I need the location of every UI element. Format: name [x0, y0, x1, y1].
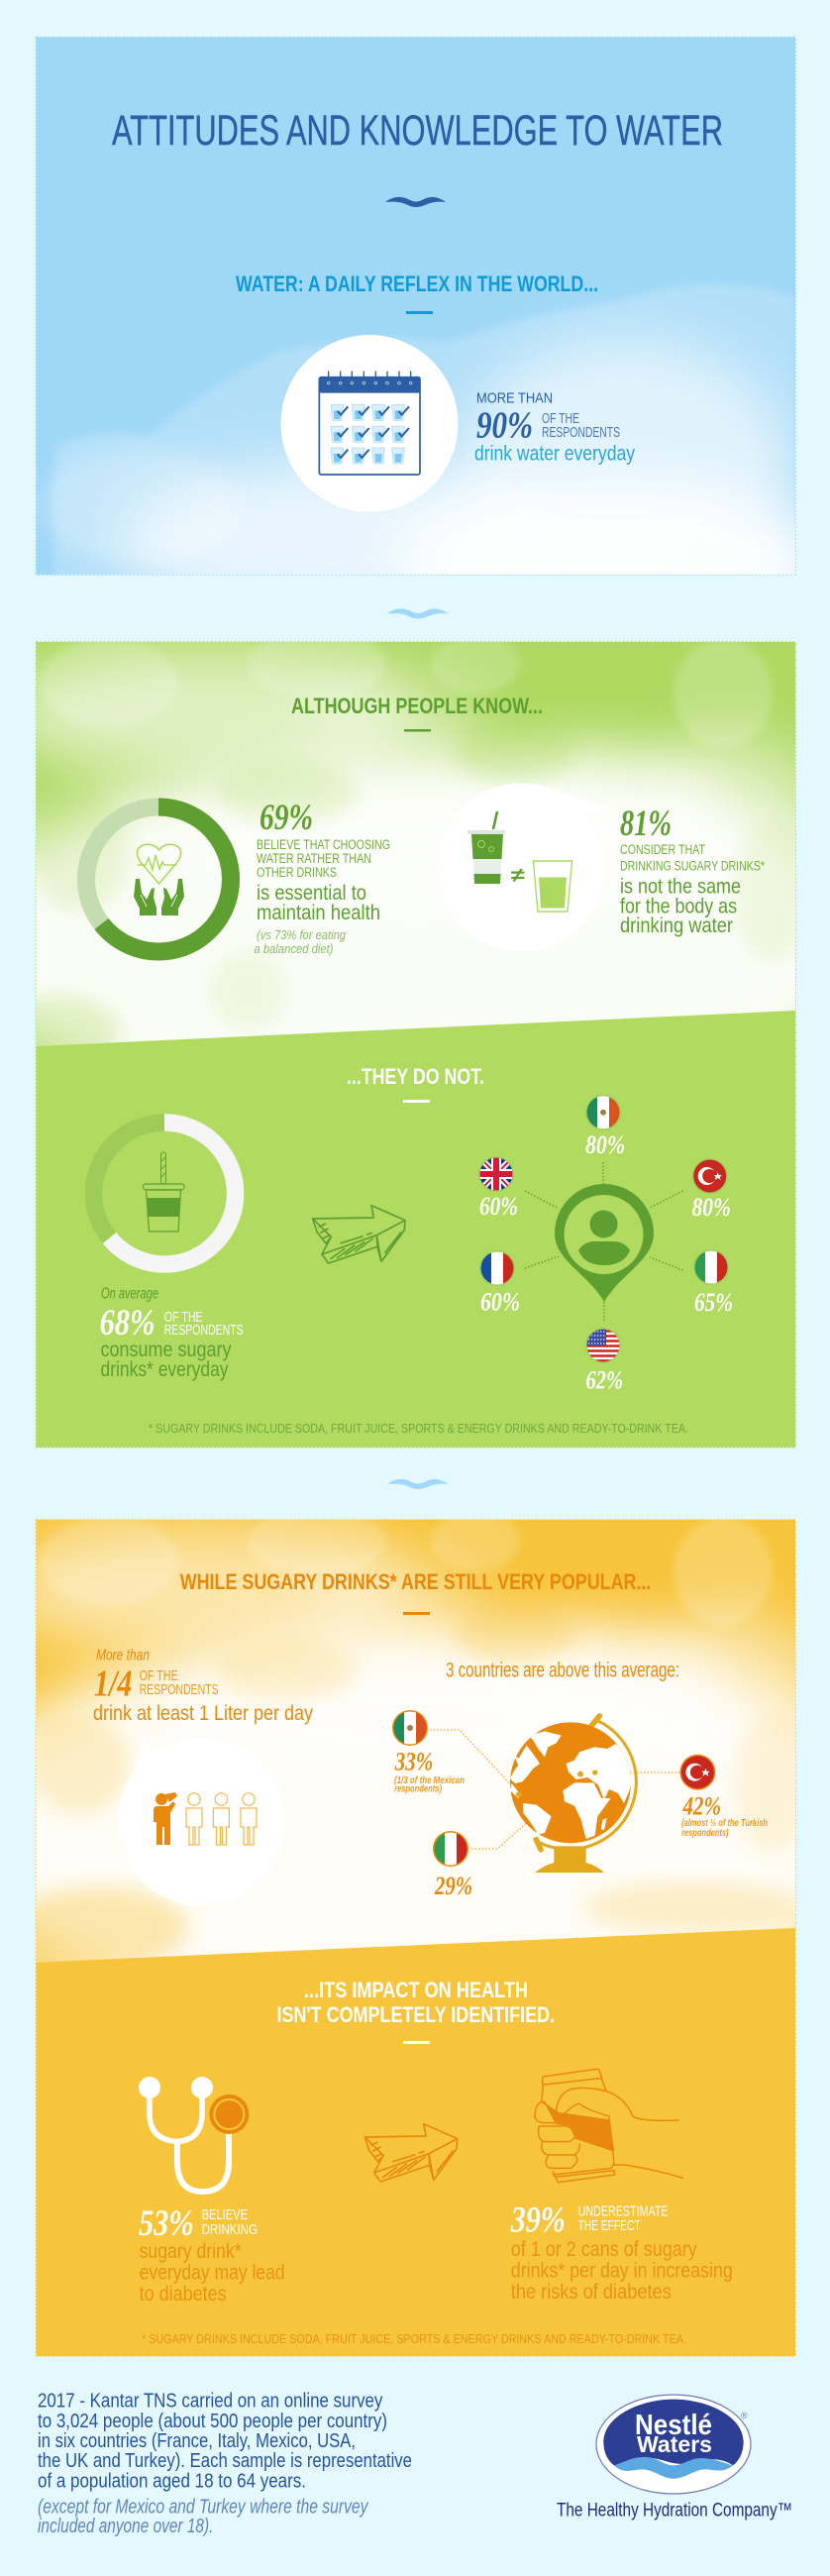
- stat: one quarter: drink at least 1 Liter per day: [93, 1702, 313, 1725]
- flag: Mexico 33 percent: (1/3 of the Mexican: [394, 1775, 465, 1786]
- flag: UK 60 percent: [478, 1156, 517, 1215]
- heading: water a daily reflex: WATER: A DAILY REFLEX IN THE WORLD...: [236, 271, 598, 296]
- flag: Turkey 42 percent: respondents): [681, 1828, 729, 1839]
- flag: Turkey 80 percent: [691, 1158, 730, 1217]
- heading: its impact on health: [277, 1978, 555, 2027]
- stat: 81 percent: for the body as: [620, 896, 737, 917]
- arrow: [313, 1206, 405, 1263]
- heading underline: [403, 1100, 430, 1103]
- heading: its impact on health: ...ITS IMPACT ON HEALTH: [304, 1978, 528, 2002]
- stat: 39 percent: 39%: [510, 2200, 566, 2241]
- footnote: sugary drinks definition: * SUGARY DRINKS INCLUDE SODA, FRUIT JUICE, SPORTS & ENERGY DRINKS AND READY-TO-DRINK TEA.: [149, 1421, 688, 1436]
- cloud texture: [36, 1520, 795, 1963]
- stat: 53 percent: everyday may lead: [140, 2261, 285, 2285]
- flag: Italy 65 percent: 65%: [694, 1288, 733, 1317]
- panel: although people know / they do not: [0, 629, 830, 1448]
- stat: 69 percent: a balanced diet): [254, 941, 333, 956]
- speech bubble: [437, 784, 607, 952]
- survey methodology text: 2017 - Kantar TNS carried on an online survey: [38, 2390, 382, 2412]
- flag: Turkey 42 percent: (almost ½ of the Turkish: [681, 1818, 768, 1829]
- icon: stethoscope: [139, 2077, 249, 2192]
- footnote: sugary drinks definition: * SUGARY DRINKS INCLUDE SODA, FRUIT JUICE, SPORTS & ENERGY DRINKS AND READY-TO-DRINK TEA.: [142, 2331, 686, 2346]
- flag: France 60 percent: [479, 1250, 519, 1311]
- stat: one quarter: [93, 1647, 313, 1725]
- icon: calendar with glasses: [319, 372, 420, 475]
- stat: 69 percent: (vs 73% for eating: [257, 927, 347, 942]
- stat: 81 percent: [620, 804, 766, 937]
- flag: Turkey 42 percent: [679, 1755, 768, 1839]
- stat: 81 percent: 81%: [620, 804, 672, 844]
- stat: 68 percent: consume sugary: [101, 1339, 232, 1361]
- heading: its impact on health: ISN'T COMPLETELY IDENTIFIED.: [277, 2002, 555, 2027]
- stat: 68 percent: 68%: [99, 1303, 155, 1343]
- stat: more than 90 percent: 90%: [476, 404, 533, 446]
- stat: 68 percent: OF THE: [164, 1310, 203, 1326]
- stat: one quarter: 1/4: [94, 1663, 133, 1704]
- heading: although people know: ALTHOUGH PEOPLE KNOW...: [291, 694, 543, 718]
- stat: 53 percent: 53%: [139, 2203, 194, 2244]
- stat: more than 90 percent: MORE THAN: [476, 390, 553, 406]
- stat: one quarter: More than: [96, 1647, 150, 1664]
- stat: 39 percent: the risks of diabetes: [511, 2281, 672, 2304]
- icon: globe: [510, 1716, 636, 1873]
- panel background sky: [36, 38, 795, 575]
- stat: one quarter: OF THE: [140, 1668, 178, 1684]
- stat: 81 percent: drinking water: [620, 914, 733, 937]
- stat: 69 percent: [254, 798, 390, 956]
- stat: 39 percent: drinks* per day in increasing: [511, 2259, 733, 2283]
- wave divider 1: [387, 608, 449, 618]
- logo: Nestlé Waters: Waters: [637, 2431, 712, 2457]
- survey methodology text: to 3,024 people (about 500 people per country): [38, 2411, 387, 2432]
- survey methodology text: [38, 2390, 412, 2537]
- stat: 69 percent: maintain health: [257, 902, 380, 924]
- stat: more than 90 percent: drink water everyday: [474, 442, 635, 466]
- flag: France 60 percent: 60%: [480, 1288, 520, 1316]
- icon: heart in hands: [134, 844, 184, 915]
- flag: Mexico 80 percent: [585, 1095, 624, 1153]
- flag: Turkey 80 percent: 80%: [691, 1193, 731, 1222]
- stat: more than 90 percent: OF THE: [542, 411, 579, 427]
- stat: 68 percent: On average: [101, 1286, 158, 1302]
- stat: 39 percent: [510, 2200, 733, 2304]
- heading underline: [406, 311, 433, 314]
- survey methodology text: the UK and Turkey). Each sample is representative: [38, 2450, 412, 2472]
- stat: one quarter: RESPONDENTS: [140, 1682, 219, 1698]
- stat: more than 90 percent: [474, 390, 635, 466]
- dotted connectors: [525, 1162, 683, 1321]
- survey methodology text: of a population aged 18 to 64 years.: [38, 2471, 306, 2493]
- heading underline: [403, 2041, 430, 2044]
- logo: Nestlé Waters: ®: [741, 2411, 748, 2420]
- flag: Mexico 33 percent: [392, 1710, 465, 1795]
- wave divider 2: [387, 1479, 449, 1489]
- icon: sugary cup not equal to water glass: [467, 811, 572, 912]
- stat: 53 percent: [139, 2203, 285, 2306]
- stat: 68 percent: RESPONDENTS: [164, 1323, 244, 1339]
- flag: Italy 29 percent: 29%: [434, 1872, 472, 1900]
- logo: Nestlé Waters: [596, 2395, 751, 2494]
- stat: 39 percent: of 1 or 2 cans of sugary: [511, 2238, 697, 2261]
- flag: Italy 29 percent: [433, 1831, 471, 1894]
- flag: USA 62 percent: 62%: [586, 1365, 623, 1395]
- icon: one person drinking out of four: [154, 1792, 257, 1845]
- stat: 69 percent: WATER RATHER THAN: [257, 851, 371, 866]
- location pin: [555, 1184, 654, 1302]
- flag: Italy 65 percent: [693, 1249, 732, 1312]
- panel background yellow: [36, 1520, 795, 2356]
- wave divider: [385, 197, 446, 207]
- stat: 81 percent: is not the same: [620, 876, 741, 898]
- stat: 81 percent: DRINKING SUGARY DRINKS*: [620, 858, 766, 874]
- flag: UK 60 percent: 60%: [479, 1192, 518, 1221]
- stat: 39 percent: UNDERESTIMATE: [578, 2203, 669, 2219]
- panel: sugary drinks popular / impact on health: [0, 1507, 830, 2356]
- stat: 53 percent: BELIEVE: [202, 2207, 248, 2223]
- flag: Mexico 80 percent: 80%: [585, 1130, 625, 1159]
- survey methodology text: (except for Mexico and Turkey where the survey: [38, 2497, 368, 2519]
- panel background green: [36, 642, 795, 1448]
- panel: water daily reflex: [36, 36, 796, 576]
- stat: 39 percent: THE EFFECT: [578, 2218, 641, 2234]
- cloud texture: [36, 642, 795, 1046]
- solid green lower section: [36, 1011, 795, 1447]
- stat: 68 percent: drinks* everyday: [101, 1358, 229, 1381]
- heading: while sugary drinks: WHILE SUGARY DRINKS* ARE STILL VERY POPULAR...: [180, 1569, 651, 1594]
- donut chart 68 percent: [93, 1123, 236, 1264]
- stat: 81 percent: CONSIDER THAT: [620, 842, 705, 857]
- heading: they do not: ...THEY DO NOT.: [347, 1064, 484, 1089]
- flag: Mexico 33 percent: respondents): [394, 1783, 443, 1795]
- stat: 53 percent: DRINKING: [202, 2222, 258, 2238]
- solid yellow lower section: [36, 1928, 795, 2356]
- stat: 69 percent: is essential to: [257, 882, 366, 905]
- speech bubble: [117, 1737, 285, 1906]
- text: 3 countries above average: 3 countries are above this average:: [446, 1659, 679, 1682]
- logo: Nestlé Waters: Nestlé: [635, 2410, 712, 2441]
- donut chart 69 percent: [86, 806, 231, 952]
- clouds: [38, 283, 795, 575]
- heading underline: [404, 729, 431, 731]
- stat: 68 percent: [99, 1286, 244, 1381]
- stat: 53 percent: to diabetes: [140, 2283, 227, 2306]
- survey methodology text: included anyone over 18).: [38, 2516, 213, 2537]
- stat: 69 percent: BELIEVE THAT CHOOSING: [257, 837, 390, 852]
- dotted connectors: [430, 1730, 680, 1849]
- heading underline: [403, 1612, 430, 1615]
- flag: Mexico 33 percent: 33%: [394, 1748, 433, 1775]
- stat: 69 percent: OTHER DRINKS: [257, 865, 337, 880]
- survey methodology text: in six countries (France, Italy, Mexico, USA,: [38, 2430, 356, 2452]
- flag: USA 62 percent: [585, 1328, 622, 1389]
- icon: sugary cup not equal to water glass: ≠: [511, 865, 525, 887]
- white circle: [281, 335, 458, 512]
- stat: more than 90 percent: RESPONDENTS: [542, 425, 620, 441]
- arrow: [364, 2124, 458, 2182]
- stat: 69 percent: 69%: [259, 798, 313, 838]
- stat: 53 percent: sugary drink*: [140, 2240, 242, 2263]
- flag: Turkey 42 percent: 42%: [682, 1791, 721, 1821]
- icon: sugary drink cup: [143, 1152, 184, 1232]
- icon: hand holding can: [535, 2069, 682, 2183]
